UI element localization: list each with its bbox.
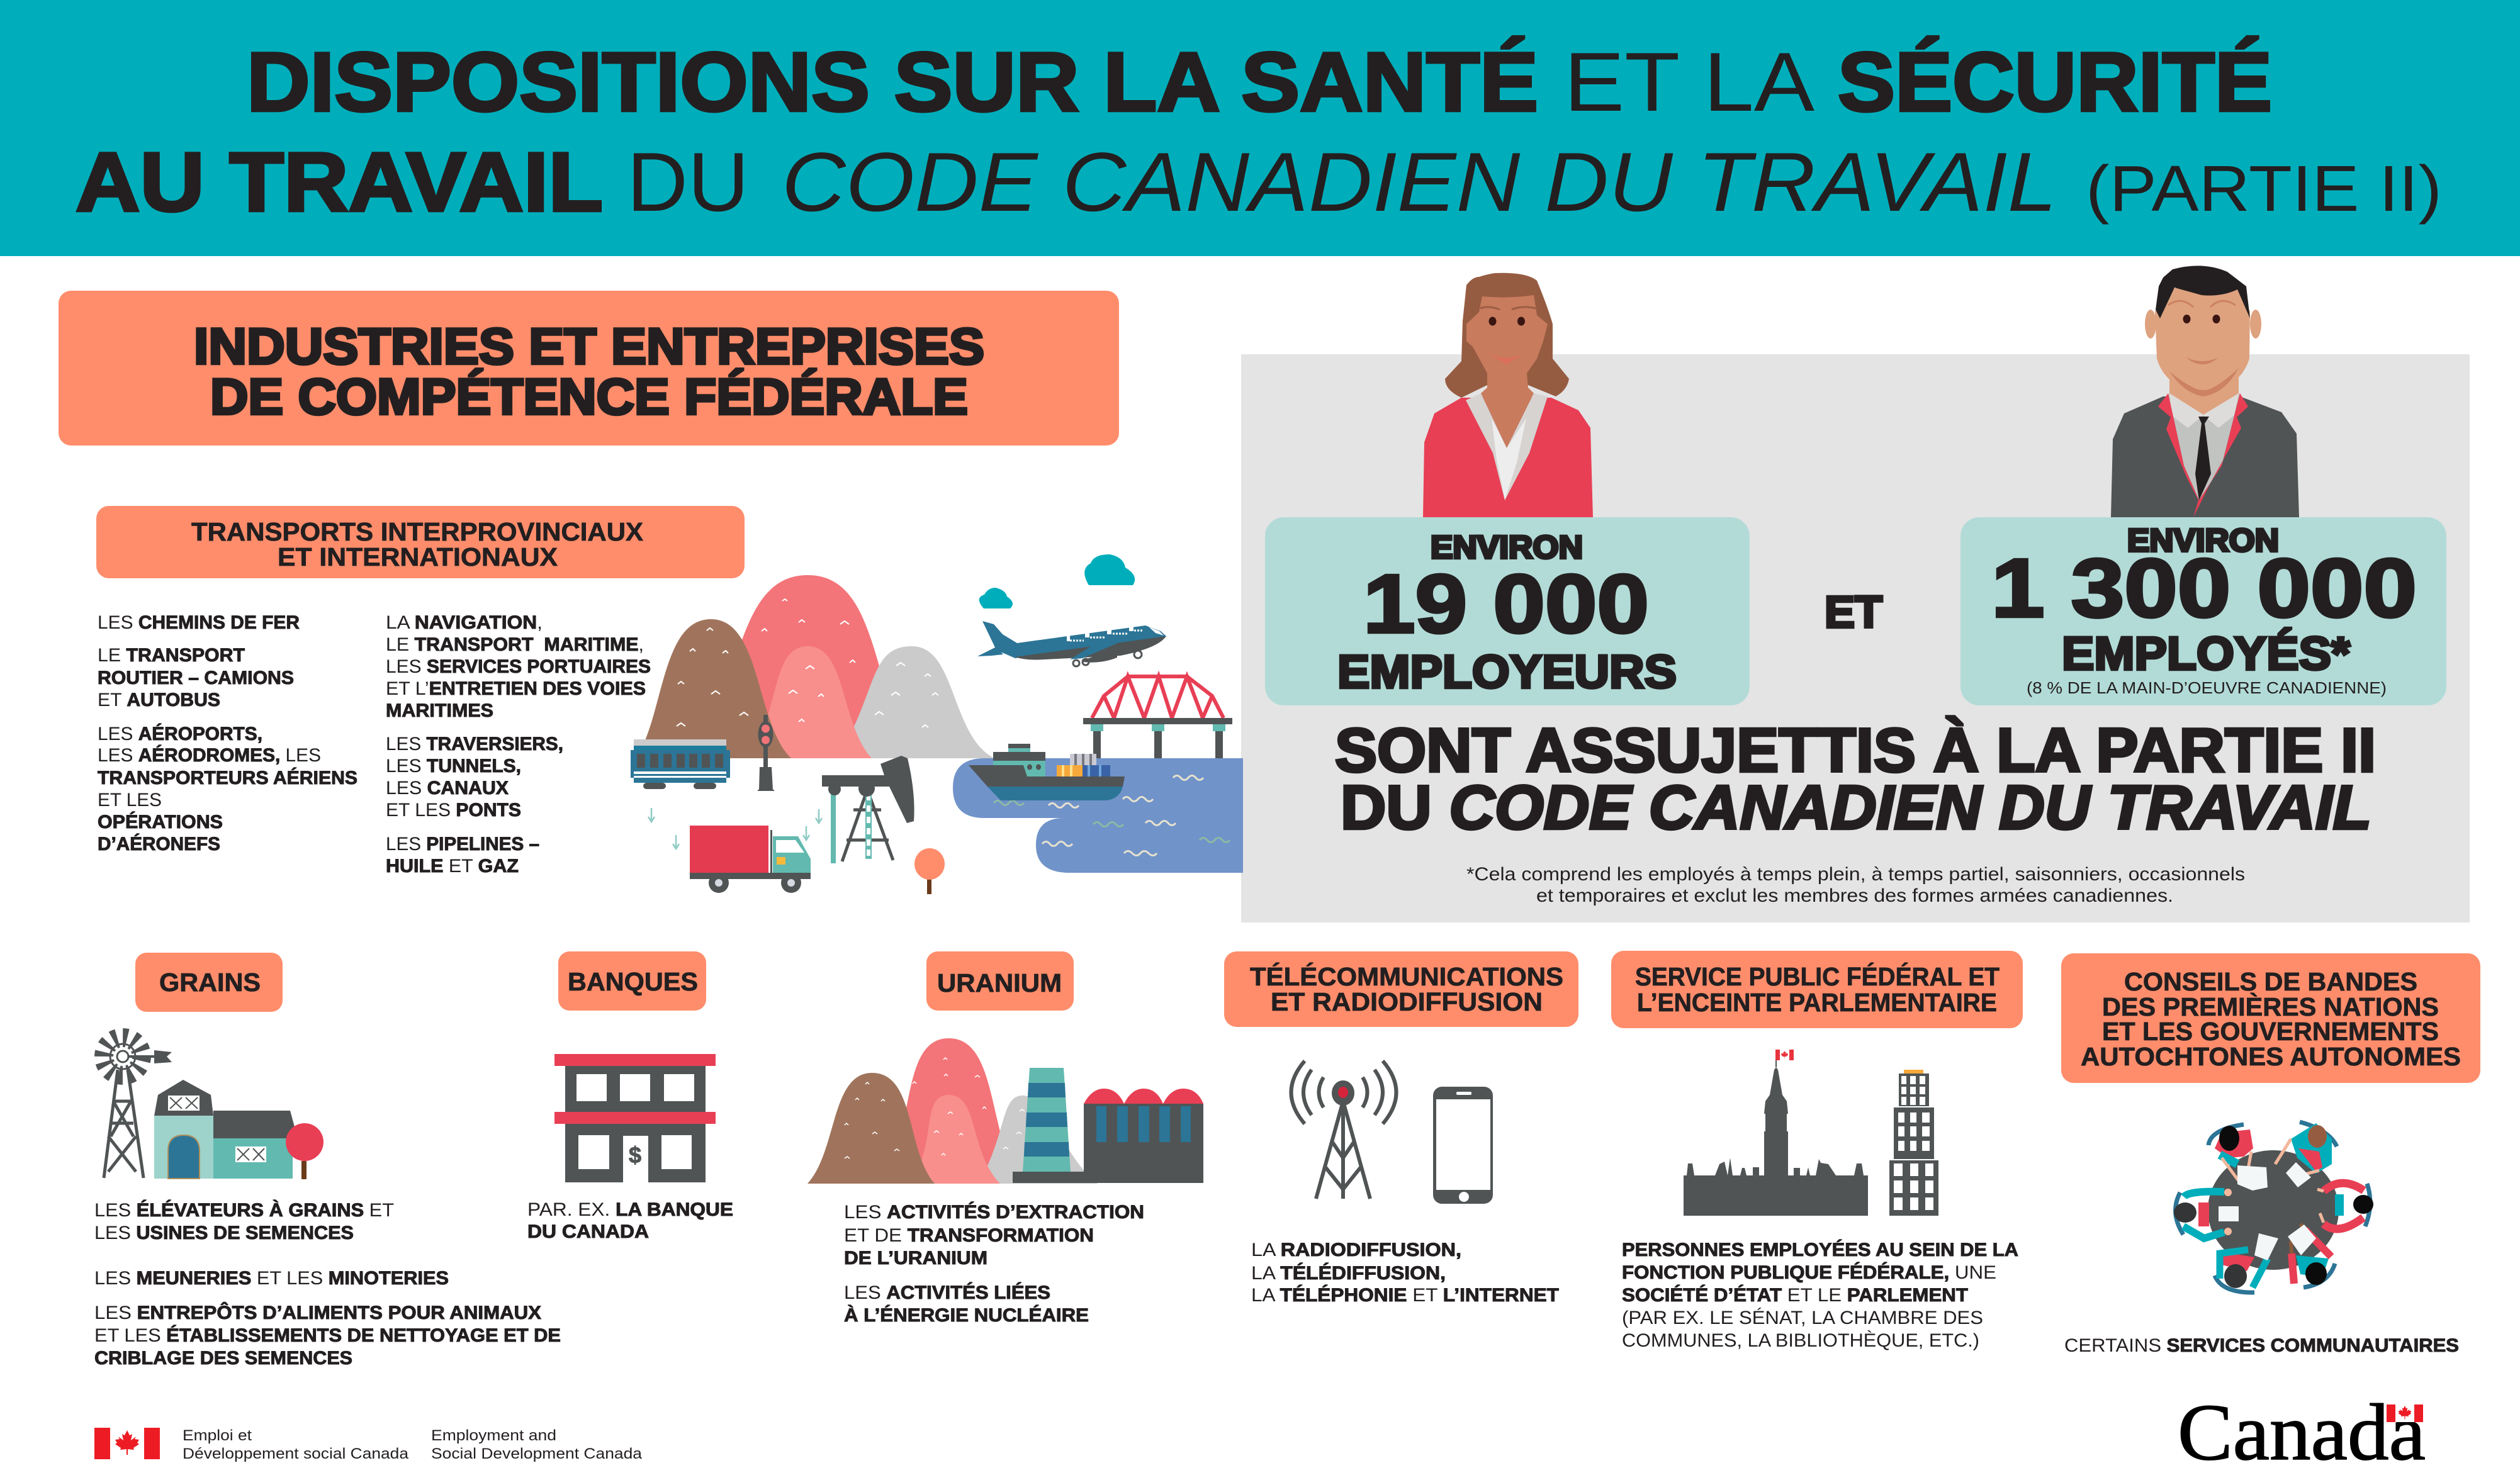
heading: industries et entreprises: DE COMPÉTENCE FÉDÉRALE [210, 368, 968, 425]
text: services communautaires: CERTAINS SERVICES COMMUNAUTAIRES [2064, 1335, 2459, 1356]
text: transports column 2: HUILE ET GAZ [386, 856, 519, 877]
text: transports column 2: LES SERVICES PORTUAIRES [386, 656, 651, 677]
text: grains: LES ÉLÉVATEURS À GRAINS ET [94, 1199, 394, 1221]
text: transports column 2: LE TRANSPORT MARITIME, [386, 634, 644, 655]
stat box: employers: EMPLOYEURS [1337, 646, 1677, 698]
footnote: et temporaires et exclut les membres des formes armées canadiennes. [1536, 885, 2173, 906]
subheading: transports: ET INTERNATIONAUX [278, 542, 558, 571]
subheading: conseils de bandes: CONSEILS DE BANDES [2124, 967, 2417, 996]
text: uranium: LES ACTIVITÉS LIÉES [844, 1282, 1050, 1303]
title banner: SÉCURITÉ [1838, 36, 2272, 129]
text: department name: Employment and [431, 1427, 556, 1444]
icon: oil pump jack [822, 756, 914, 863]
text: grains: ET LES ÉTABLISSEMENTS DE NETTOYAGE ET DE [94, 1325, 561, 1346]
text: uranium: ET DE TRANSFORMATION [844, 1225, 1094, 1246]
text: transports column 1: LE TRANSPORT [98, 645, 245, 666]
illustration: woman employer [1423, 273, 1593, 517]
text: telecommunications [1251, 1240, 1559, 1306]
subheading: banques: BANQUES [568, 967, 698, 996]
subheading: conseils de bandes [2061, 953, 2480, 1083]
icon: bank building: $ [629, 1142, 641, 1168]
icon: radio tower [1291, 1061, 1396, 1199]
subheading: transports: TRANSPORTS INTERPROVINCIAUX [191, 517, 643, 546]
text: transports column 2: LES CANAUX [386, 778, 509, 799]
text: service public: (PAR EX. LE SÉNAT, LA CHAMBRE DES [1622, 1308, 1983, 1328]
text: department name: Développement social Canada [183, 1445, 409, 1462]
icon: parliament [1684, 1050, 1868, 1216]
text: transports column 1: ET AUTOBUS [98, 690, 220, 710]
icon: train car [631, 739, 730, 789]
text: grains: LES USINES DE SEMENCES [94, 1223, 354, 1243]
subheading: conseils de bandes: ET LES GOUVERNEMENTS [2102, 1017, 2439, 1046]
subheading: telecommunications [1224, 951, 1578, 1027]
text: transports column 2 [386, 612, 651, 877]
text: transports column 2: ET LES PONTS [386, 800, 521, 821]
stat box: employers [1265, 517, 1750, 705]
stat box: employees: 1 300 000 [1991, 542, 2417, 634]
connector: et: ET [1825, 588, 1882, 637]
text: transports column 1: LES AÉROPORTS, [98, 723, 262, 744]
title banner: ET LA [1564, 36, 1814, 129]
subheading: service public [1611, 951, 2023, 1028]
icon: delivery truck [690, 826, 811, 893]
stat box: employers: ENVIRON [1431, 529, 1583, 565]
subheading: uranium: URANIUM [937, 968, 1062, 997]
subheading: service public: SERVICE PUBLIC FÉDÉRAL ET [1635, 962, 2000, 991]
text: transports column 1: LES CHEMINS DE FER [98, 612, 300, 633]
icon: railway signal [758, 715, 774, 791]
icon: grass tufts [648, 808, 822, 849]
icon: clouds [979, 554, 1135, 608]
title banner: (PARTIE II) [2086, 152, 2442, 225]
text: transports column 2: LES PIPELINES – [386, 834, 539, 855]
icon: smartphone [1433, 1087, 1493, 1204]
text: transports column 2: MARITIMES [386, 700, 493, 721]
text: banques: PAR. EX. LA BANQUE [527, 1199, 733, 1220]
icon: orange tree [914, 848, 945, 894]
illustration: man employee [2111, 266, 2299, 517]
text: service public: COMMUNES, LA BIBLIOTHÈQUE, ETC.) [1622, 1330, 1979, 1351]
text: telecommunications: LA TÉLÉPHONIE ET L’INTERNET [1251, 1284, 1559, 1306]
stat box: employees: ENVIRON [2127, 522, 2279, 558]
subheading: uranium [926, 951, 1074, 1011]
subheading: conseils de bandes: AUTOCHTONES AUTONOMES [2081, 1042, 2461, 1071]
heading: industries et entreprises: INDUSTRIES ET ENTREPRISES [194, 318, 984, 375]
text: transports column 1: TRANSPORTEURS AÉRIENS [98, 767, 357, 788]
text: transports column 1: D’AÉRONEFS [98, 833, 220, 855]
title banner: DISPOSITIONS SUR LA SANTÉ [247, 36, 1538, 129]
text: transports column 1: ET LES [98, 790, 162, 810]
illustration: water [953, 758, 1243, 873]
icon: barn [154, 1080, 323, 1179]
icon: bank building [554, 1054, 716, 1182]
statement: assujettis: DU CODE CANADIEN DU TRAVAIL [1341, 773, 2371, 842]
text: grains [94, 1199, 561, 1369]
text: transports column 1: OPÉRATIONS [98, 811, 223, 832]
text: banques [527, 1199, 733, 1242]
text: transports column 2: LA NAVIGATION , [386, 612, 543, 633]
text: transports column 2: LES TUNNELS, [386, 756, 521, 776]
text: department name: Social Development Canada [431, 1445, 643, 1462]
stat box: employees [1960, 517, 2446, 705]
text: transports column 2: LES TRAVERSIERS, [386, 734, 563, 754]
icon: airplane [977, 621, 1166, 666]
stat box: employees: EMPLOYÉS* [2062, 627, 2350, 680]
panel: statistics background [1241, 354, 2470, 922]
subheading: grains [135, 953, 283, 1012]
text: transports column 1 [98, 612, 357, 855]
footnote: *Cela comprend les employés à temps plein, à temps partiel, saisonniers, occasionnels [1466, 864, 2245, 885]
text: uranium: LES ACTIVITÉS D’EXTRACTION [844, 1201, 1144, 1223]
icon: people around table [2174, 1122, 2373, 1292]
icon: cargo ship [969, 744, 1125, 800]
subheading: telecommunications: ET RADIODIFFUSION [1271, 987, 1543, 1016]
subheading: service public: L’ENCEINTE PARLEMENTAIRE [1637, 988, 1997, 1017]
subheading: grains: GRAINS [159, 968, 261, 997]
text: uranium: À L’ÉNERGIE NUCLÉAIRE [844, 1304, 1089, 1326]
stat box: employees: (8 % DE LA MAIN-D’OEUVRE CANADIENNE) [2027, 678, 2387, 697]
text: department name: Emploi et [183, 1427, 252, 1444]
stat box: employers: 19 000 [1363, 558, 1649, 650]
text: banques: DU CANADA [527, 1221, 649, 1242]
text: telecommunications: LA RADIODIFFUSION, [1251, 1240, 1461, 1260]
icon: windmill [104, 1038, 172, 1178]
title banner: AU TRAVAIL [76, 136, 603, 229]
text: uranium: DE L’URANIUM [844, 1248, 987, 1269]
text: department name [183, 1427, 643, 1462]
icon: office tower [1889, 1070, 1938, 1216]
text: telecommunications: LA TÉLÉDIFFUSION, [1251, 1262, 1446, 1284]
logo: canada flag signature [94, 1428, 160, 1459]
text: grains: CRIBLAGE DES SEMENCES [94, 1348, 352, 1369]
text: uranium [844, 1201, 1144, 1326]
text: transports column 1: LES AÉRODROMES, LES [98, 744, 321, 766]
text: service public: SOCIÉTÉ D’ÉTAT ET LE PARLEMENT [1622, 1284, 1968, 1306]
subheading: conseils de bandes: DES PREMIÈRES NATIONS [2102, 992, 2439, 1021]
text: grains: LES MEUNERIES ET LES MINOTERIES [94, 1268, 449, 1289]
subheading: banques [558, 951, 706, 1011]
title banner: CODE CANADIEN DU TRAVAIL [782, 136, 2057, 229]
text: service public [1622, 1239, 2018, 1351]
subheading: transports [96, 506, 745, 578]
statement: assujettis [1335, 715, 2376, 842]
text: service public: FONCTION PUBLIQUE FÉDÉRALE, UNE [1622, 1262, 1996, 1283]
text: service public: PERSONNES EMPLOYÉES AU SEIN DE LA [1622, 1239, 2018, 1260]
text: grains: LES ENTREPÔTS D’ALIMENTS POUR ANIMAUX [94, 1302, 541, 1323]
subheading: telecommunications: TÉLÉCOMMUNICATIONS [1250, 962, 1563, 991]
footnote [1466, 864, 2245, 906]
statement: assujettis: SONT ASSUJETTIS À LA PARTIE II [1335, 715, 2376, 785]
illustration: mountains [636, 575, 994, 758]
icon: bridge [1083, 676, 1232, 758]
title banner [0, 0, 2520, 256]
heading: industries et entreprises [59, 291, 1119, 446]
title banner: DU [627, 136, 749, 229]
text: transports column 2: ET L’ENTRETIEN DES VOIES [386, 678, 646, 699]
text: transports column 1: ROUTIER – CAMIONS [98, 668, 294, 688]
icon: uranium mine and plant [807, 1038, 1203, 1184]
